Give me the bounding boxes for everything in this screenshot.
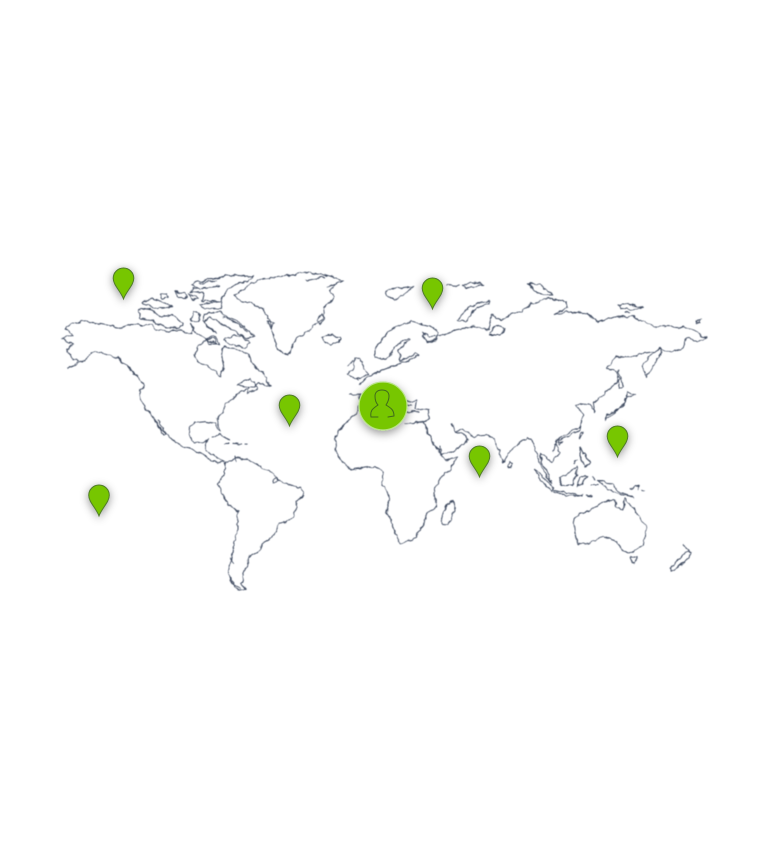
Madagascar bbox=[442, 500, 455, 525]
Europe and northern Asia bbox=[340, 282, 707, 452]
icon: person bbox=[371, 390, 394, 417]
map pin: Pacific Ocean bbox=[89, 485, 109, 516]
Africa bbox=[335, 420, 457, 544]
world map outline bbox=[63, 273, 707, 591]
central user badge bbox=[359, 382, 407, 430]
South and Southeast Asia bbox=[440, 420, 644, 498]
map pin: Philippine Sea bbox=[607, 426, 628, 457]
map pin: Atlantic Ocean bbox=[279, 395, 300, 426]
map pin: Indian Ocean bbox=[469, 446, 490, 477]
North America and Arctic Canada bbox=[63, 273, 344, 420]
Australia and New Zealand bbox=[573, 498, 692, 571]
map pin: North America bbox=[113, 268, 134, 299]
map pin: Arctic Ocean bbox=[422, 278, 443, 309]
Central and South America bbox=[155, 420, 303, 591]
